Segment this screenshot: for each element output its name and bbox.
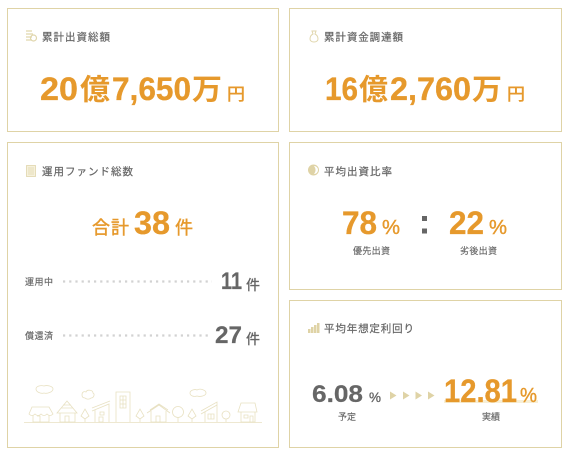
arrows: [390, 392, 434, 400]
row: redeemed funds: 27: [215, 322, 242, 349]
value: 78%: 78: [342, 205, 377, 241]
row: active funds: [25, 268, 260, 295]
panel: cumulative investment: [8, 8, 278, 132]
row: redeemed funds: 件: [246, 331, 260, 347]
value: 22%: [449, 205, 507, 256]
value: planned 6.08%: [312, 381, 381, 422]
value: 20億7,650万円: 円: [227, 85, 245, 104]
icon: coins: [26, 31, 36, 41]
heading: total funds: 運用ファンド総数: [42, 165, 134, 178]
heading: average investment ratio: 平均出資比率: [324, 165, 392, 178]
total: 38 funds: 38: [134, 205, 170, 241]
panel: total funds: [8, 142, 278, 448]
value: 20億7,650万円: 20: [40, 71, 78, 107]
illustration: townscape: [24, 386, 262, 422]
value: 20億7,650万円: 万: [192, 74, 222, 106]
value: 22%: 劣後出資: [460, 245, 497, 256]
value: actual 12.81%: %: [520, 385, 537, 407]
icon: document: [26, 166, 36, 176]
value: 16億2,760万円: 円: [507, 85, 525, 104]
value: 16億2,760万円: 万: [472, 74, 502, 106]
colon separator: [422, 216, 427, 234]
value: actual 12.81%: [444, 373, 538, 422]
icon: pie chart: [308, 164, 319, 176]
row: redeemed funds: [25, 322, 260, 349]
panel: average expected yield: [290, 300, 562, 448]
row: active funds: 11: [221, 268, 242, 295]
value: planned 6.08%: 6.08: [312, 381, 363, 408]
row: redeemed funds: 償還済: [25, 330, 53, 341]
heading: average expected yield: 平均年想定利回り: [324, 322, 414, 335]
row: active funds: 件: [246, 277, 260, 293]
value: planned 6.08%: 予定: [338, 412, 356, 422]
value: 16億2,760万円: 2,760: [390, 71, 471, 107]
icon: money bag: [310, 31, 318, 42]
value: 20億7,650万円: 7,650: [112, 71, 191, 107]
value: 20億7,650万円: [40, 71, 245, 107]
row: active funds: 運用中: [25, 276, 53, 287]
heading: cumulative funding: 累計資金調達額: [324, 30, 404, 44]
total: 38 funds: [92, 205, 193, 241]
value: 78%: 優先出資: [353, 245, 390, 256]
value: actual 12.81%: 12.81: [444, 373, 517, 409]
total: 38 funds: 合計: [92, 218, 129, 238]
value: actual 12.81%: 実績: [482, 411, 500, 422]
value: 78%: %: [382, 217, 400, 239]
value: 16億2,760万円: 億: [359, 74, 388, 106]
value: planned 6.08%: %: [369, 389, 381, 405]
heading: cumulative investment: 累計出資総額: [42, 30, 110, 44]
total: 38 funds: 件: [175, 218, 193, 238]
value: 22%: %: [489, 217, 507, 239]
value: 22%: 22: [449, 205, 484, 241]
icon: bars: [308, 323, 320, 333]
panel: average investment ratio: [290, 142, 562, 290]
value: 16億2,760万円: 16: [325, 71, 358, 107]
value: 20億7,650万円: 億: [80, 74, 110, 106]
panel: cumulative funding: [290, 8, 562, 132]
value: 78%: [342, 205, 400, 256]
value: 16億2,760万円: [325, 71, 525, 107]
